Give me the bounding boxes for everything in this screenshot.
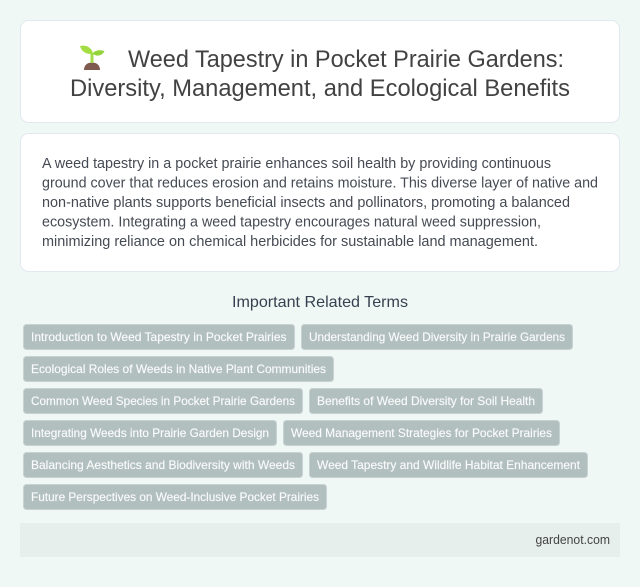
description text: ecosystem. Integrating a weed tapestry encourages natural weed suppression, xyxy=(42,214,541,230)
tag xyxy=(24,324,294,350)
tag xyxy=(24,452,302,478)
tag xyxy=(310,388,542,414)
title xyxy=(70,46,570,102)
tag: Integrating Weeds into Prairie Garden Design xyxy=(31,426,269,440)
tag: Understanding Weed Diversity in Prairie Gardens xyxy=(309,330,565,344)
description text: ground cover that reduces erosion and retains moisture. This diverse layer of native and xyxy=(42,175,598,191)
tag: Common Weed Species in Pocket Prairie Gardens xyxy=(31,394,295,408)
tag xyxy=(302,324,572,350)
description text: minimizing reliance on chemical herbicides for sustainable land management. xyxy=(42,234,538,250)
tag: Introduction to Weed Tapestry in Pocket Prairies xyxy=(31,330,286,344)
title: Diversity, Management, and Ecological Benefits xyxy=(70,75,570,102)
heading: important related terms: Important Related Terms xyxy=(232,294,408,311)
tag: Future Perspectives on Weed-Inclusive Pocket Prairies xyxy=(31,490,319,504)
title: Weed Tapestry in Pocket Prairie Gardens: xyxy=(128,46,564,73)
description text: non-native plants supports beneficial insects and pollinators, promoting a balanced xyxy=(42,195,570,211)
tag xyxy=(310,452,588,478)
tag: Benefits of Weed Diversity for Soil Health xyxy=(317,394,535,408)
tag: Weed Management Strategies for Pocket Prairies xyxy=(291,426,552,440)
footer xyxy=(20,523,620,557)
description text: A weed tapestry in a pocket prairie enhances soil health by providing continuous xyxy=(42,156,551,172)
tag: Weed Tapestry and Wildlife Habitat Enhancement xyxy=(317,458,581,472)
tag xyxy=(24,484,326,510)
description text xyxy=(42,156,598,250)
tag list xyxy=(24,324,588,510)
tag: Ecological Roles of Weeds in Native Plant Communities xyxy=(31,362,326,376)
tag xyxy=(24,388,302,414)
tag xyxy=(24,356,334,382)
panel: header xyxy=(20,20,620,122)
tag xyxy=(24,420,276,446)
panel: description xyxy=(20,134,620,272)
tag: Balancing Aesthetics and Biodiversity with Weeds xyxy=(31,458,295,472)
icon: seedling xyxy=(80,46,104,70)
footer: gardenot.com xyxy=(536,533,610,547)
tag xyxy=(284,420,560,446)
